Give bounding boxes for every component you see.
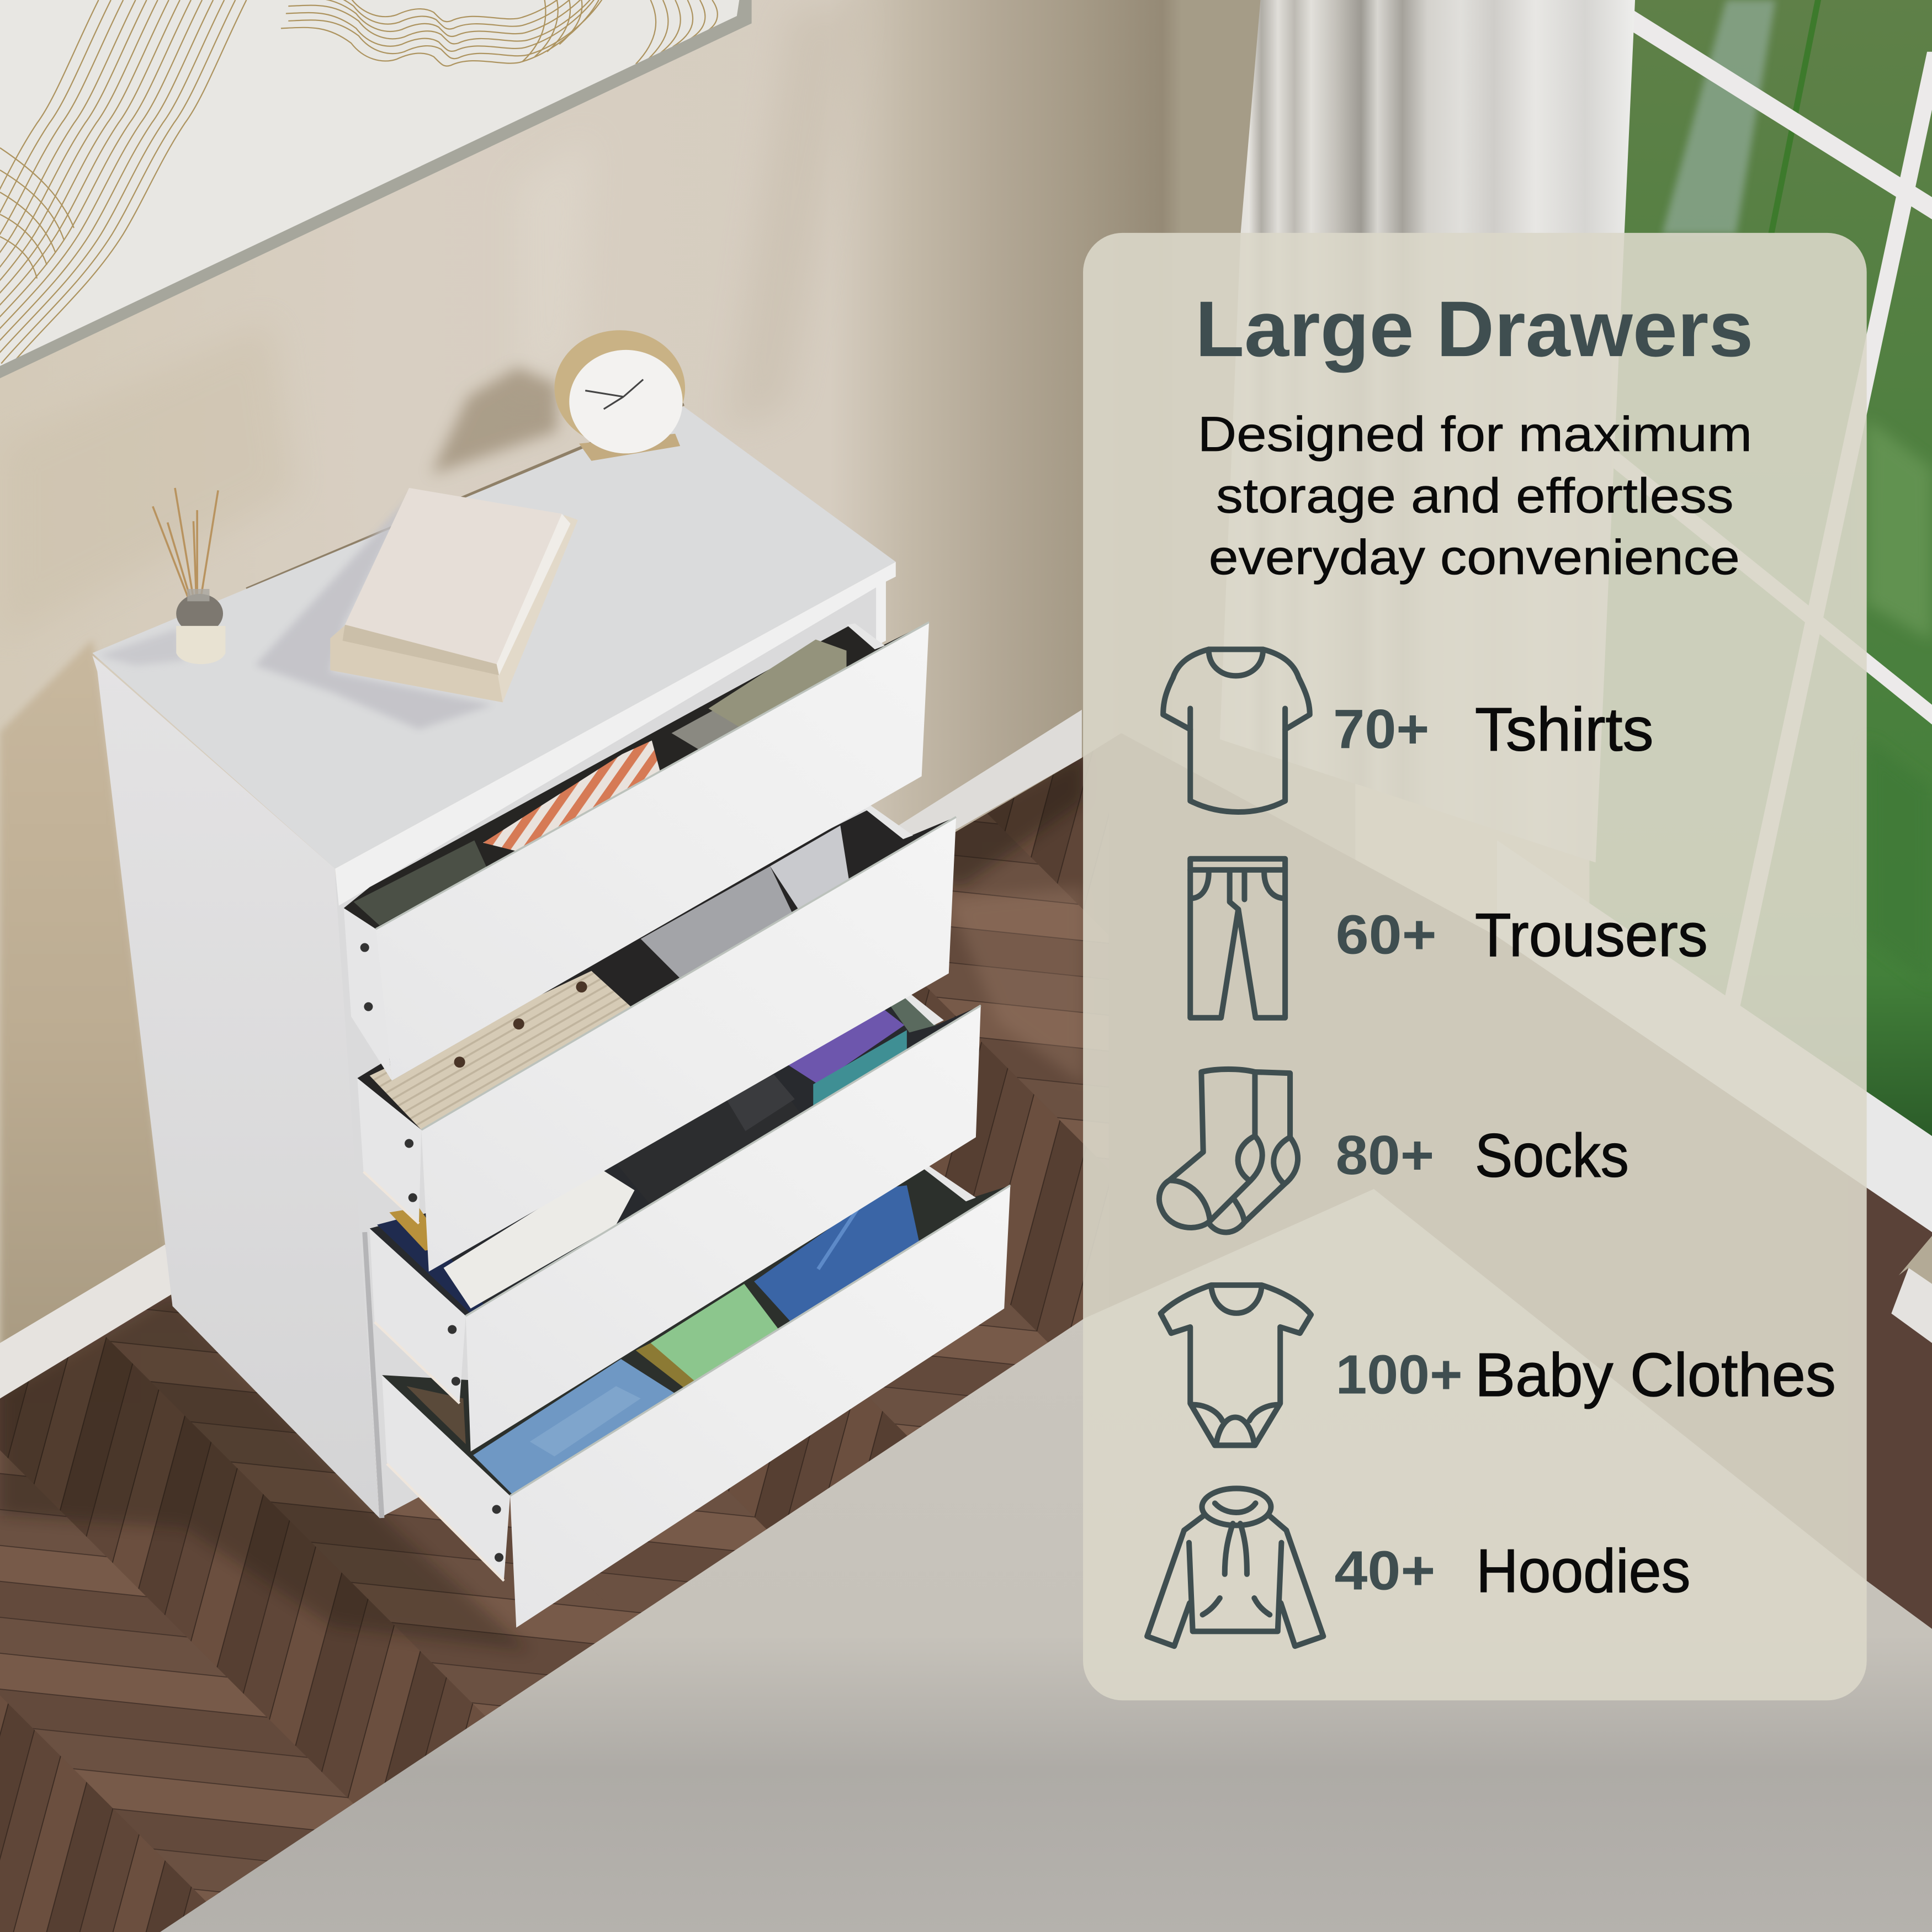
drawer 3 bottom edge: [375, 1322, 460, 1403]
label: Tshirts: [1475, 694, 1654, 763]
dresser grey edge: [365, 1232, 382, 1518]
label: Trousers: [1475, 900, 1708, 969]
olive shirt: [708, 639, 846, 727]
panel background: [1083, 233, 1867, 1700]
drawer 2 interior: [357, 808, 956, 1130]
lower left wall shadow: [0, 639, 175, 1349]
navy folded clothes: [377, 1214, 487, 1313]
rug: [160, 1189, 1932, 1932]
mustard fabric: [636, 1343, 695, 1389]
blue hoodie: [754, 1185, 919, 1322]
drawer 1 back rim: [846, 623, 885, 649]
soft wall light streaks: [0, 0, 862, 641]
clock base: [579, 434, 680, 461]
black garment: [616, 1071, 801, 1205]
dresser top: [92, 407, 896, 869]
brown folded clothes: [407, 1386, 466, 1444]
drawer 1 front: [376, 622, 929, 1081]
white shirt: [444, 1169, 635, 1309]
drawer 4: [382, 1164, 1010, 1628]
lower book: [330, 519, 575, 702]
striped shirt: [483, 741, 660, 851]
drawer 4 front: [510, 1185, 1010, 1628]
dresser front frame: [335, 579, 882, 1518]
window with grass: [1589, 0, 1932, 1146]
lighter floor band: [949, 887, 1084, 1084]
drawer 2 top lip: [421, 817, 956, 1130]
baseboard right: [895, 710, 1082, 850]
count: 40+: [1334, 1540, 1435, 1601]
right floor: [1848, 1171, 1932, 1651]
title: Large Drawers: [1195, 285, 1753, 373]
drawer 3 back rim: [895, 988, 944, 1025]
dark knit: [354, 840, 487, 925]
upper book pages: [497, 514, 570, 675]
light grey hoodie: [770, 826, 849, 909]
floor shadow under baseboard: [953, 758, 1083, 889]
label: Socks: [1475, 1121, 1629, 1190]
row: baby clothes: [1161, 1285, 1836, 1445]
drawer 3 interior: [370, 991, 981, 1316]
herringbone parquet: [0, 757, 1083, 1932]
clock back shell: [554, 330, 685, 446]
drawer 3 side: [370, 1228, 466, 1402]
drawer 4 top lip: [510, 1185, 1010, 1496]
drawer 3: [370, 988, 981, 1451]
green shirt: [651, 1284, 779, 1381]
clock hands: [585, 380, 643, 409]
purple shirt: [784, 1004, 904, 1084]
drawer 1 side: [344, 908, 392, 1081]
drawer 4 bottom edge: [387, 1464, 504, 1581]
bottle label: [176, 626, 225, 664]
bottle neck: [187, 589, 209, 601]
grey sweater: [641, 866, 792, 978]
count: 70+: [1333, 698, 1429, 760]
drawer 2 front: [421, 817, 956, 1272]
grey fabric: [672, 696, 752, 752]
count: 80+: [1336, 1124, 1434, 1186]
subtitle: Designed for maximum: [1198, 406, 1752, 461]
stacked books: [330, 488, 578, 702]
hoodie strap: [818, 1201, 862, 1269]
curtain: [1220, 0, 1635, 862]
window sill: [1497, 840, 1932, 1232]
label: Hoodies: [1476, 1536, 1690, 1605]
row: trousers: [1190, 859, 1708, 1018]
upper book: [345, 488, 562, 664]
dresser: [92, 330, 1010, 1628]
drawer 1 top lip: [376, 622, 929, 929]
book spine: [498, 515, 578, 702]
subtitle: storage and effortless: [1216, 468, 1734, 523]
panel: large drawers: [1083, 233, 1867, 1700]
yellow folded clothes: [389, 1208, 446, 1251]
drawer 4 side: [382, 1375, 510, 1580]
clock face: [569, 350, 683, 453]
reeds: [153, 488, 218, 621]
clock shadow on wall: [431, 367, 557, 474]
icon: baby bodysuit: [1161, 1285, 1311, 1445]
wall: [0, 0, 1355, 1479]
label: Baby Clothes: [1475, 1340, 1836, 1409]
baseboard left: [0, 1244, 172, 1398]
drawer 2 side: [357, 1078, 421, 1222]
tan wall sliver: [1899, 1236, 1932, 1284]
drawer 2 back rim: [862, 806, 913, 839]
row: tshirts: [1163, 649, 1654, 812]
drawer 3 front: [466, 1005, 981, 1451]
jeans: [473, 1359, 675, 1495]
window muntins: [1516, 7, 1932, 1060]
clock: [554, 330, 685, 461]
icon: hoodie: [1147, 1488, 1323, 1646]
count: 60+: [1336, 904, 1437, 966]
drawer 3 top lip: [466, 1005, 981, 1316]
count: 100+: [1336, 1344, 1463, 1406]
dresser side: [92, 656, 380, 1518]
drawer 4 interior: [382, 1169, 1010, 1496]
row: socks: [1159, 1069, 1629, 1233]
black pocket: [727, 1074, 795, 1131]
floor base: [0, 733, 1932, 1932]
drawer 2: [357, 806, 956, 1272]
shadow on top from diffuser: [99, 628, 185, 665]
drawer 2 bottom edge: [363, 1172, 419, 1224]
floor shadow beside dresser: [0, 1294, 530, 1651]
cream knit: [370, 971, 631, 1130]
small white trim: [1891, 1268, 1932, 1343]
row: hoodies: [1147, 1488, 1690, 1646]
teal shirt: [813, 1030, 907, 1106]
reed diffuser: [153, 488, 225, 664]
bottle: [176, 594, 223, 633]
subtitle: everyday convenience: [1209, 529, 1740, 585]
drawer 4 back rim: [918, 1164, 976, 1201]
subtitle: [1198, 406, 1752, 585]
shadow on top from book: [255, 493, 493, 729]
painting: [0, 0, 739, 366]
painting frame: [0, 0, 752, 378]
icon: t-shirt: [1163, 649, 1310, 812]
icon: trousers: [1190, 859, 1285, 1018]
drawer 3 back: [885, 991, 936, 1033]
right post: [876, 577, 886, 646]
painting contour lines: [0, 0, 718, 363]
top front edge: [335, 562, 896, 906]
drawer 1 interior: [344, 622, 929, 929]
knit buttons: [454, 1057, 465, 1068]
window reflection and grass tones: [1662, 0, 1932, 986]
drawer 1: [344, 622, 929, 1081]
icon: socks: [1159, 1069, 1298, 1233]
shadow band behind dresser: [246, 404, 684, 589]
jeans highlight: [530, 1386, 641, 1456]
